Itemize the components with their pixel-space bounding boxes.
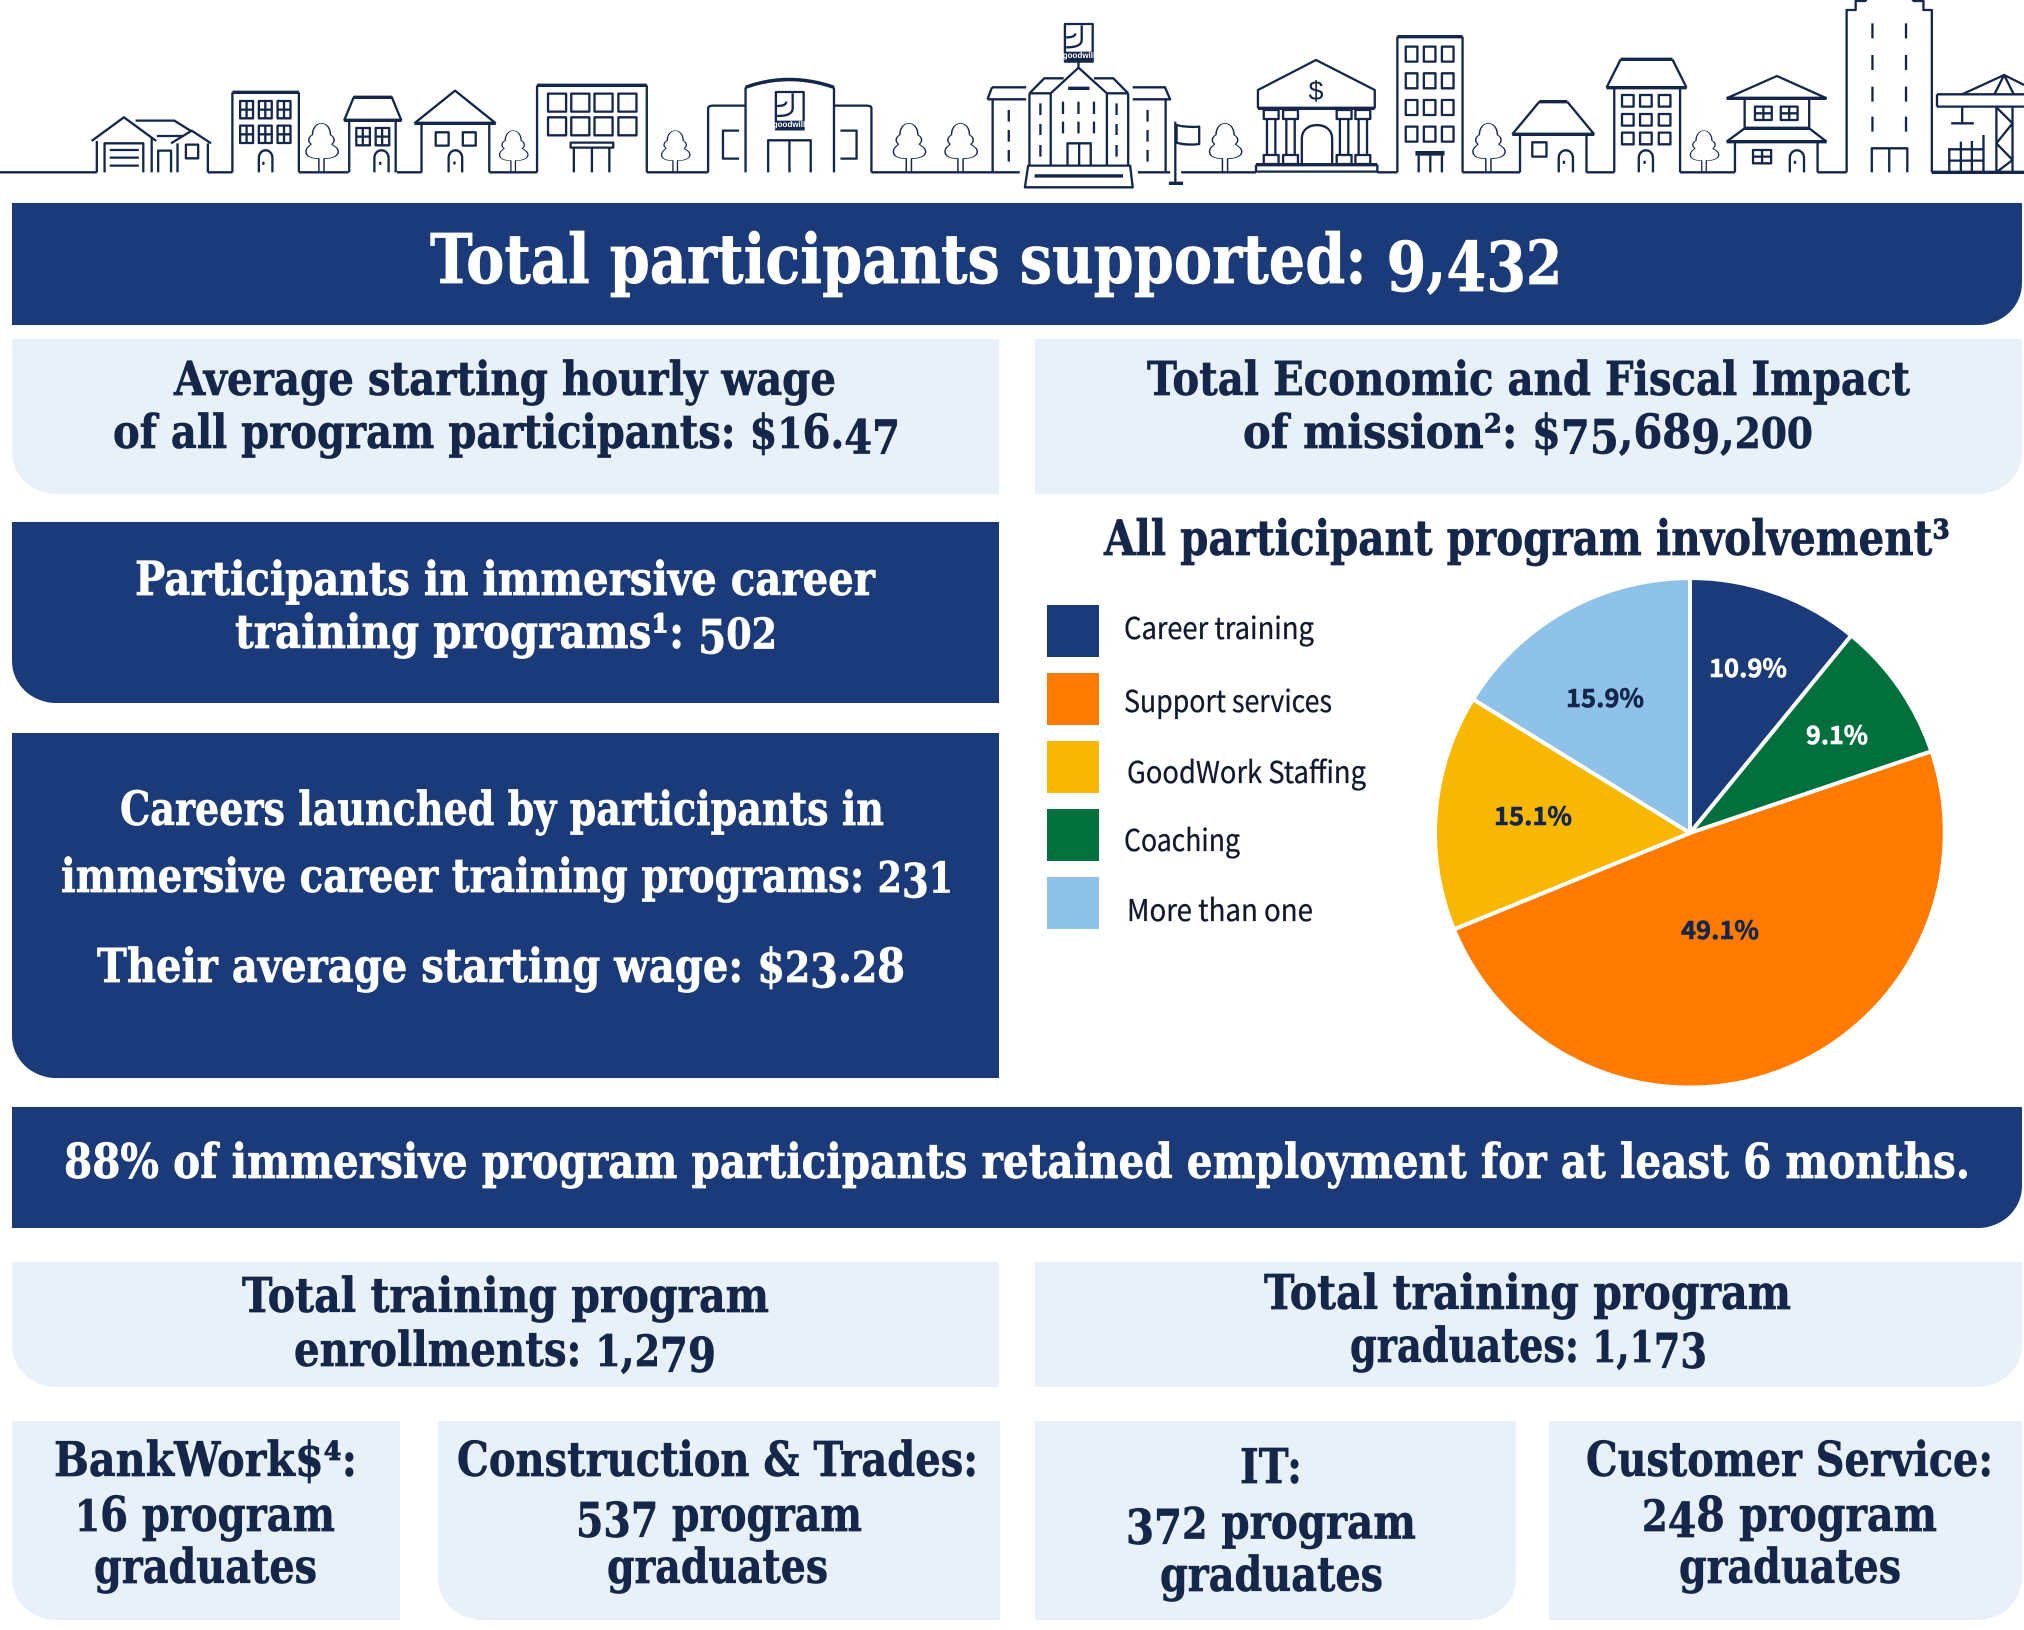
- slice: support services: [1454, 751, 1945, 1088]
- icon: house cluster: [92, 117, 211, 172]
- icon: small house: [1512, 102, 1594, 172]
- immersive text: Participants in immersive career: [135, 552, 876, 607]
- icon: civic hall: [987, 24, 1170, 187]
- customer service text: 4: [1668, 1493, 1696, 1549]
- legend item: support services: Support services: [1124, 677, 1332, 721]
- value labels: 49.1%: [1681, 911, 1759, 947]
- careers text: 28: [852, 939, 910, 994]
- panel: immersive participants: [12, 522, 999, 703]
- icon: two-storey house: [1727, 76, 1827, 172]
- value labels: 9.1%: [1806, 716, 1868, 752]
- wage text: Average starting hourly wage: [173, 352, 836, 407]
- value labels: 10.9%: [1709, 649, 1787, 685]
- legend item: more than one: [1047, 877, 1313, 930]
- enrollments text: Total training program: [242, 1268, 769, 1324]
- goodwill sign caption: goodwill: [773, 120, 805, 129]
- banner heading: ,: [1426, 220, 1446, 300]
- economic impact text: 9: [1691, 411, 1720, 466]
- wage text: [113, 352, 900, 466]
- icon: narrow house: [344, 97, 402, 172]
- construction text: 537: [576, 1493, 658, 1549]
- icon: tree: [306, 123, 338, 172]
- economic impact text: Total Economic and Fiscal Impact: [1147, 352, 1910, 407]
- ground line right: [993, 171, 1847, 173]
- icon: tree: [1473, 123, 1505, 172]
- banner: retention: [12, 1107, 2022, 1228]
- it text: 37: [1126, 1500, 1182, 1556]
- icon: tall building: [1397, 37, 1463, 172]
- bankworks text: BankWork$⁴:: [54, 1432, 357, 1488]
- legend item: career training: Career training: [1124, 604, 1314, 648]
- it text: IT:: [1240, 1439, 1302, 1495]
- icon: construction crane: [1937, 75, 2024, 172]
- value labels: 15.1%: [1494, 797, 1572, 833]
- panel: total graduates: [1035, 1262, 2022, 1387]
- construction text: graduates: [607, 1539, 828, 1595]
- icon: townhouse: [1607, 59, 1687, 172]
- economic impact text: ,68: [1619, 405, 1691, 460]
- panel: average starting wage: [12, 339, 999, 494]
- icon: tree: [1210, 123, 1242, 172]
- enrollments text: 79: [660, 1328, 716, 1384]
- graduates text: 73: [1654, 1324, 1707, 1380]
- immersive text: 02: [726, 609, 777, 659]
- careers text: Their average starting wage: $2: [97, 939, 903, 994]
- legend item: coaching: Coaching: [1124, 816, 1240, 860]
- careers text: immersive career training programs: 2: [61, 849, 1036, 904]
- bankworks text: [54, 1432, 357, 1595]
- slice: goodwork staffing: [1435, 699, 1690, 929]
- banner heading: 2: [1526, 228, 1562, 299]
- customer service text: [1586, 1432, 1993, 1595]
- legend item: goodwork staffing: GoodWork Staffing: [1127, 748, 1366, 792]
- economic impact text: of mission²: $: [1243, 405, 1602, 460]
- icon: tower: [1847, 0, 1932, 172]
- bankworks text: 16 program: [75, 1487, 335, 1543]
- value labels: 15.9%: [1566, 679, 1644, 715]
- icon: goodwill store: [708, 79, 871, 172]
- panel: customer service: [1549, 1421, 2022, 1620]
- banner heading: 43: [1446, 228, 1526, 308]
- icon: gabled house: [414, 91, 496, 172]
- immersive text: 5: [698, 611, 726, 666]
- pie chart: [1435, 578, 1945, 1088]
- legend item: career training: [1047, 604, 1314, 657]
- bank dollar sign: $: [1308, 76, 1324, 106]
- graduates text: graduates: 1,1: [1350, 1318, 1660, 1374]
- wage text: 47: [844, 411, 900, 466]
- banner: total participants: [12, 203, 2022, 325]
- icon: apartment building: [232, 92, 299, 172]
- icon: tree: [945, 123, 977, 172]
- wage text: of all program participants: $16.: [113, 405, 893, 460]
- customer service text: program: [1741, 1487, 1973, 1543]
- panel: economic impact: [1035, 339, 2022, 494]
- economic impact text: [1147, 352, 1910, 466]
- icon: tree: [662, 131, 690, 172]
- careers text: 1: [929, 853, 953, 903]
- icon: tree: [1690, 131, 1719, 172]
- panel: total enrollments: [12, 1262, 999, 1387]
- enrollments text: [242, 1268, 769, 1384]
- icon: tree: [893, 123, 926, 172]
- legend item: coaching: [1047, 809, 1240, 861]
- it text: [1126, 1439, 1416, 1603]
- economic impact text: ,: [1720, 405, 1735, 460]
- icon: tree: [500, 131, 528, 172]
- goodwill sign caption: goodwill: [1063, 51, 1095, 60]
- panel: careers launched: [12, 733, 999, 1078]
- immersive text: training programs¹:: [235, 605, 756, 660]
- careers text: [61, 782, 953, 1000]
- customer service text: graduates: [1679, 1539, 1901, 1595]
- skyline right half: [987, 0, 2024, 187]
- graduates text: Total training program: [1264, 1265, 1791, 1321]
- ground line left: [0, 171, 993, 173]
- construction text: [457, 1432, 978, 1595]
- skyline left half: [0, 79, 993, 172]
- careers text: 3: [902, 855, 929, 910]
- customer service text: 2: [1642, 1491, 1668, 1542]
- panel: bankworks: [12, 1421, 400, 1620]
- slice: coaching: [1690, 636, 1932, 833]
- banner heading: Total participants supported:: [430, 220, 1541, 300]
- construction text: program: [658, 1487, 862, 1543]
- graduates text: [1264, 1265, 1791, 1380]
- enrollments text: enrollments: 1,2: [294, 1322, 665, 1378]
- legend item: more than one: More than one: [1127, 886, 1313, 930]
- panel: it: [1035, 1421, 1516, 1620]
- customer service text: 8: [1696, 1487, 1725, 1543]
- careers text: 3: [810, 945, 838, 1000]
- slice: more than one: [1473, 578, 1690, 833]
- value labels: [1494, 649, 1868, 947]
- careers text: .: [838, 939, 852, 994]
- it text: 2: [1182, 1499, 1207, 1550]
- banner heading: 9: [1386, 228, 1426, 308]
- construction text: Construction & Trades:: [457, 1432, 978, 1488]
- legend item: goodwork staffing: [1047, 741, 1366, 793]
- icon: flag: [1169, 122, 1199, 183]
- icon: office block: [537, 85, 647, 172]
- bankworks text: graduates: [94, 1539, 317, 1595]
- economic impact text: 200: [1735, 408, 1813, 458]
- careers text: Careers launched by participants in: [120, 782, 884, 837]
- it text: graduates: [1160, 1547, 1383, 1603]
- panel: construction and trades: [438, 1421, 1000, 1620]
- economic impact text: 75: [1561, 411, 1619, 466]
- icon: bank: [1256, 60, 1377, 172]
- legend item: support services: [1047, 673, 1332, 725]
- it text: program: [1224, 1495, 1456, 1551]
- immersive text: [135, 552, 876, 666]
- legend: [1047, 604, 1366, 930]
- slice: career training: [1690, 578, 1851, 833]
- skyline illustration: [0, 0, 2024, 187]
